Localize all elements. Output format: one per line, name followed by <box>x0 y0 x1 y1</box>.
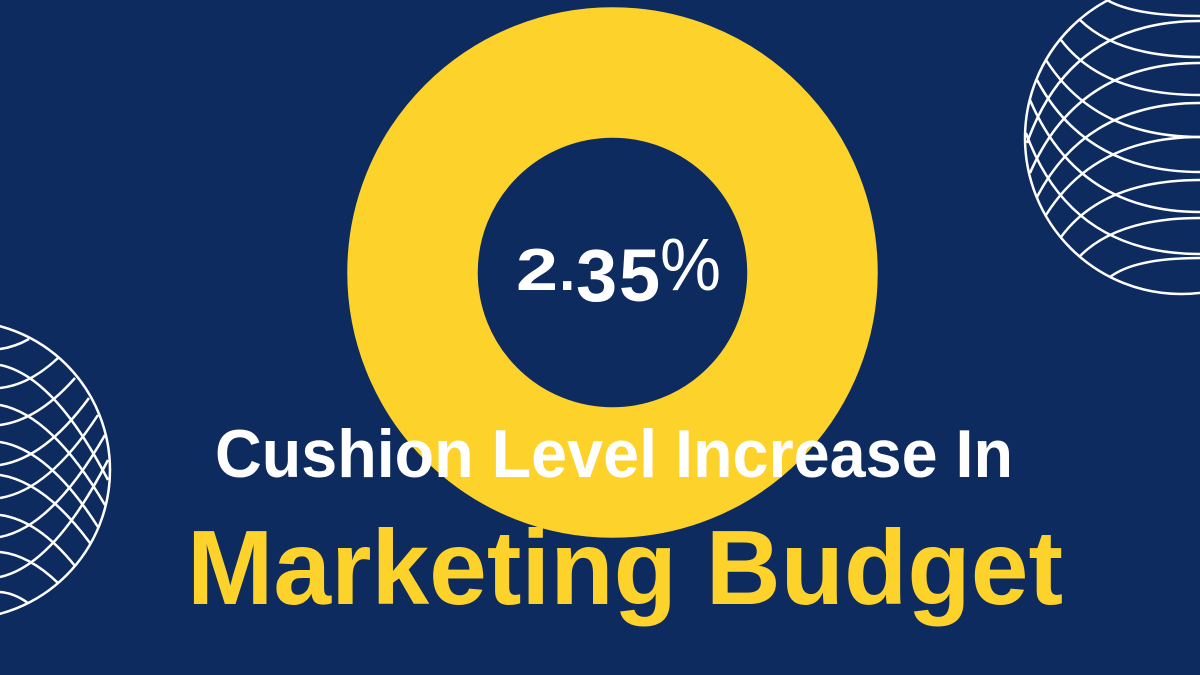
donut value: 2.35% <box>516 223 721 317</box>
donut value: 2.35%: 3 <box>576 234 617 317</box>
heading line: Marketing Budget: Marketing Budget <box>187 509 1063 627</box>
heading line: Cushion Level Increase In: Cushion Level Increase In <box>215 416 1013 492</box>
donut value: 2.35%: 5 <box>619 234 660 317</box>
donut value: 2.35%: . <box>559 237 575 303</box>
icon: wireframe globe top right <box>1025 0 1200 294</box>
donut value: 2.35%: 2 <box>516 237 558 303</box>
icon: wireframe globe bottom left <box>0 321 110 619</box>
donut chart ring <box>412 72 812 472</box>
donut value: 2.35%: % <box>660 223 721 306</box>
